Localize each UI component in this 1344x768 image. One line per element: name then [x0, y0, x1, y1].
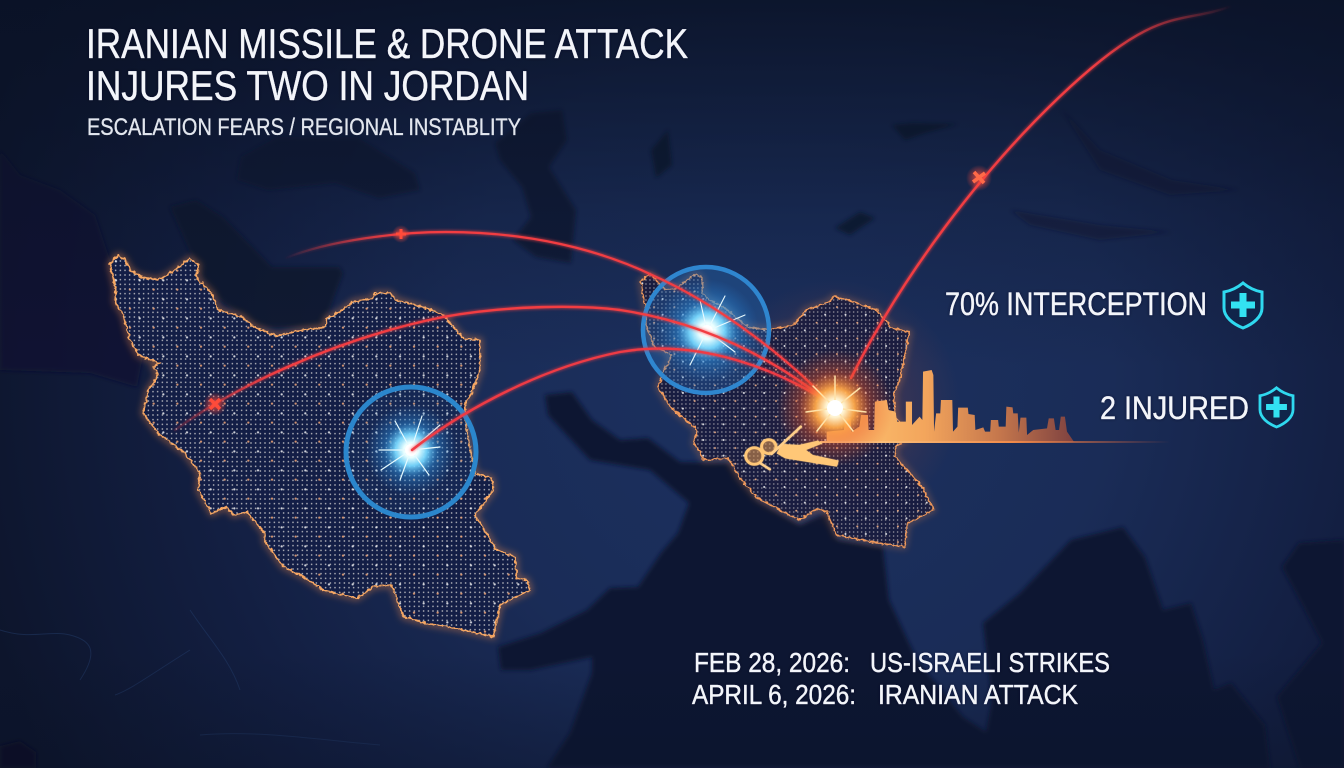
- eastern gulf: [1277, 540, 1344, 768]
- icon: injured person lying down: [746, 427, 839, 469]
- small country fill: [641, 273, 933, 547]
- impact: blue target ring on small map: [643, 267, 769, 393]
- stat: interception rate: 70% INTERCEPTION: [945, 286, 1207, 322]
- small dot matrix: [641, 273, 933, 547]
- impact: blue target ring on large map: [346, 387, 476, 517]
- caspian sea: [495, 110, 576, 263]
- ground flare: [820, 441, 1170, 443]
- marker: eastern: [966, 165, 992, 191]
- western sea: [0, 150, 145, 387]
- arc: upper from west: [286, 232, 832, 405]
- timeline row 1: FEB 28, 2026:: [694, 647, 850, 678]
- timeline row 1: US-ISRAELI STRIKES: [870, 647, 1110, 678]
- title: INJURES TWO IN JORDAN: [86, 62, 529, 109]
- timeline text: [692, 647, 1110, 710]
- icon: shield with cross, injured: [1260, 388, 1293, 427]
- interception markers: [203, 165, 992, 416]
- small outline glow: [641, 273, 933, 547]
- impact: orange blast: [777, 350, 893, 466]
- border line: [110, 255, 530, 637]
- timeline row 1: [694, 647, 1110, 678]
- small border line: [641, 273, 933, 547]
- bright sparkle dots: [110, 255, 530, 637]
- skyline silhouette: [820, 370, 1170, 443]
- missile trajectory arcs: [175, 6, 1232, 450]
- subtitle: ESCALATION FEARS / REGIONAL INSTABLITY: [87, 114, 521, 141]
- timeline row 2: APRIL 6, 2026:: [692, 679, 856, 710]
- dot matrix: [110, 255, 530, 637]
- arc: to upper right: [851, 6, 1232, 378]
- marker: northern: [392, 225, 410, 243]
- stat: injured count: 2 INJURED: [1100, 390, 1249, 426]
- lakes and dark mountain streaks: [651, 107, 1240, 240]
- southwest corner sea: [0, 741, 36, 768]
- title: IRANIAN MISSILE & DRONE ATTACK: [86, 20, 688, 67]
- title: [86, 20, 688, 109]
- warm area glow: [710, 280, 960, 530]
- mediterranean basin: [170, 200, 343, 327]
- map: large country outline with dotted fill: [110, 255, 530, 637]
- small sparkle dots: [641, 273, 933, 547]
- arc: lower from blue impact: [412, 349, 832, 450]
- black sea: [237, 137, 420, 198]
- timeline row 2: IRANIAN ATTACK: [878, 679, 1079, 710]
- indian ocean: [498, 392, 1270, 768]
- country fill: [110, 255, 530, 637]
- arc: middle from far west: [175, 307, 832, 430]
- marker: western: [203, 392, 227, 416]
- timeline row 2: [692, 679, 1079, 710]
- faint terrain lines: [0, 610, 380, 745]
- icon: shield with cross, interception: [1224, 283, 1262, 328]
- map: small country outline with dotted fill: [641, 273, 960, 547]
- outline glow: [110, 255, 530, 637]
